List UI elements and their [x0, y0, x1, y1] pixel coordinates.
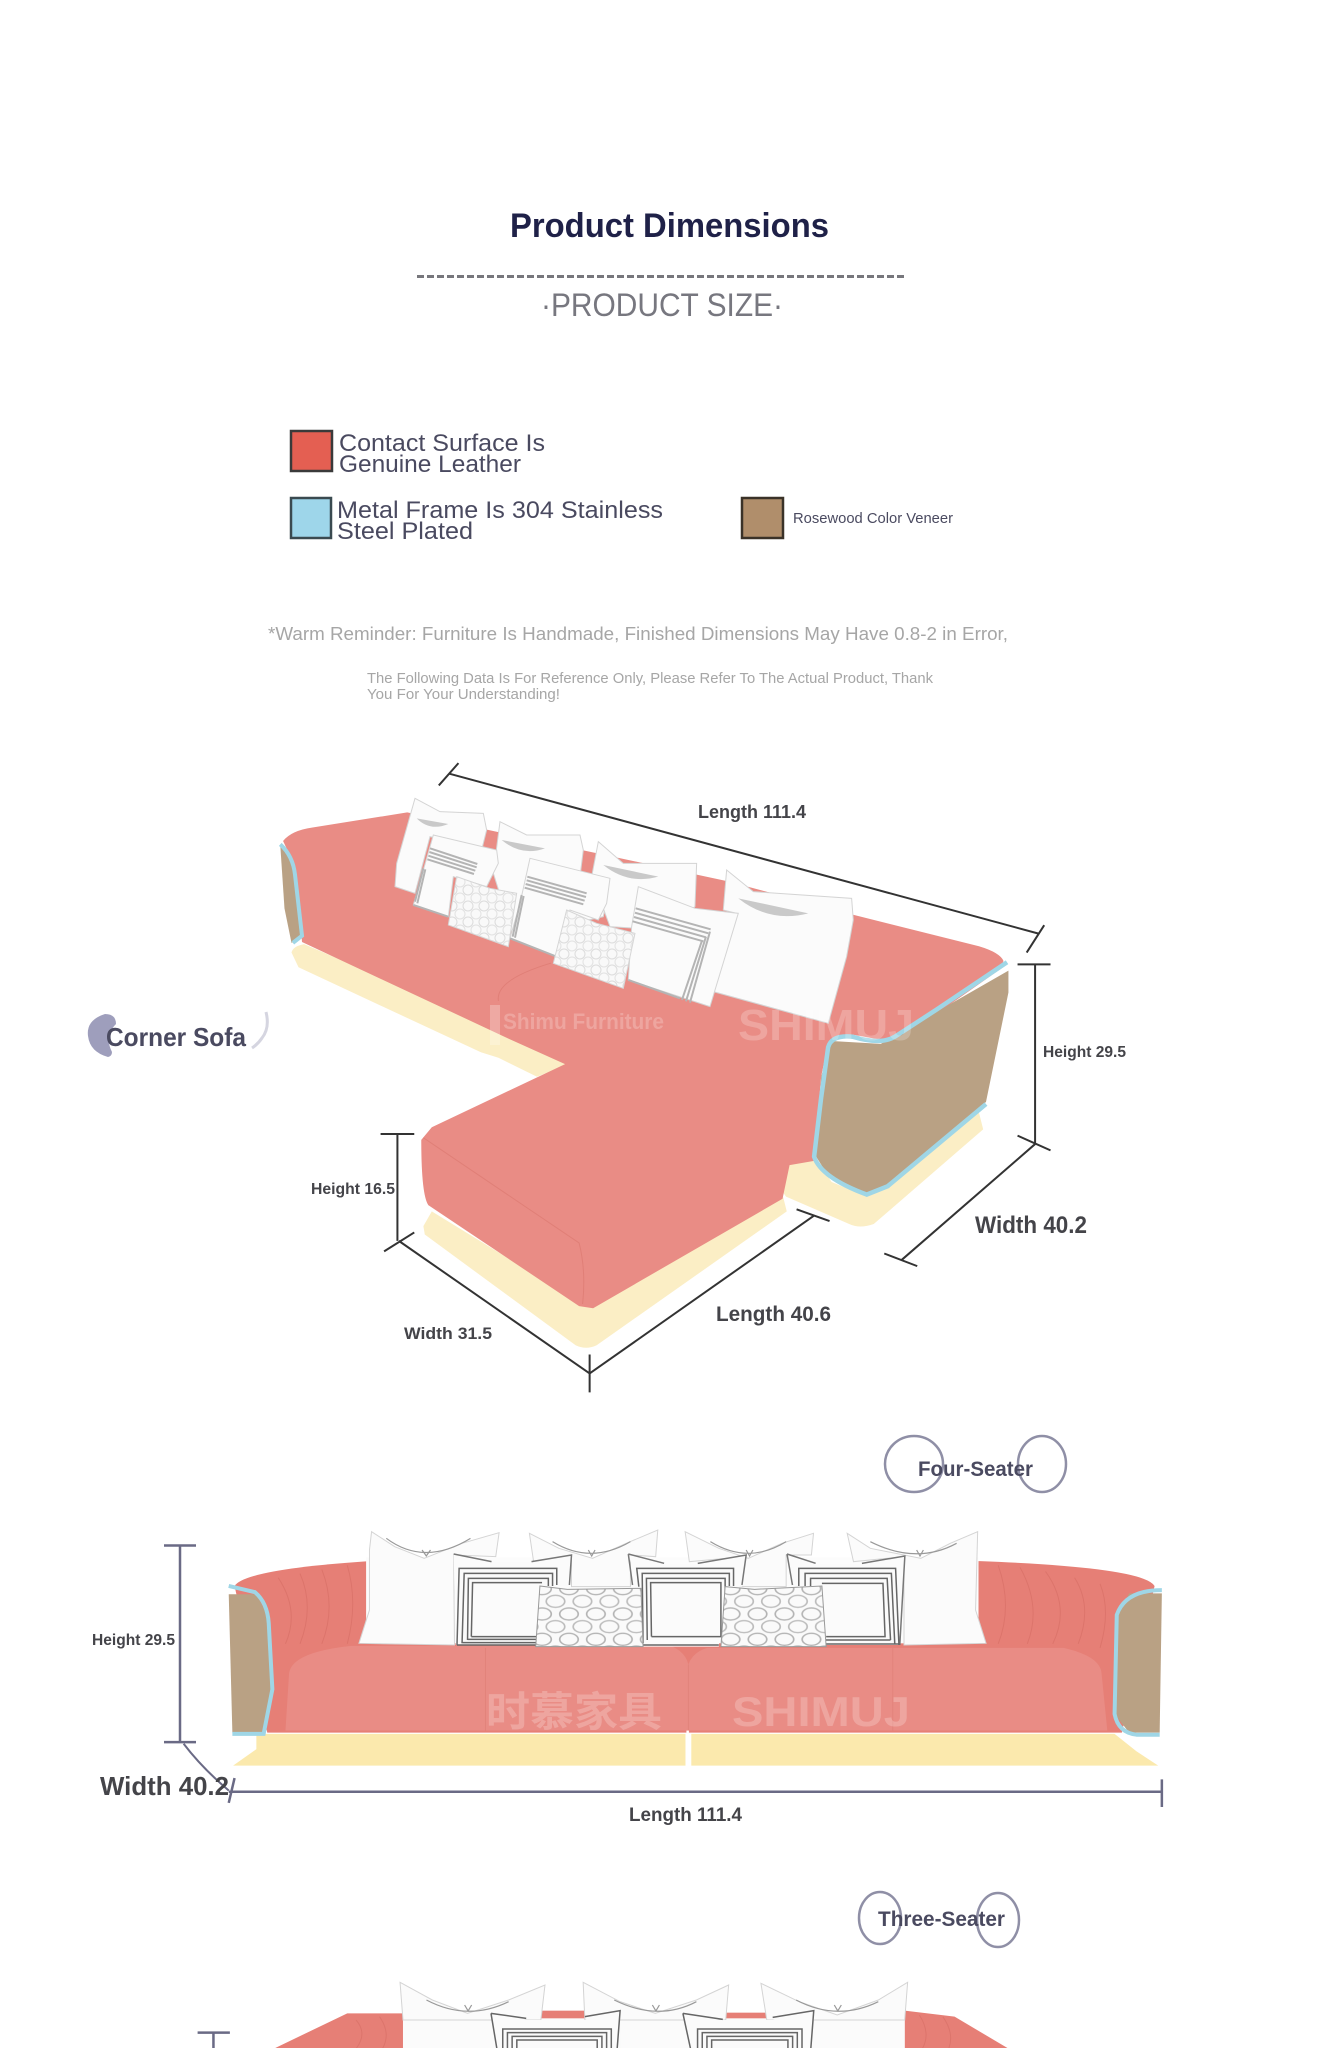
legend text: metal frame: Metal Frame Is 304 Stainless — [337, 497, 663, 524]
legend text: metal frame: Steel Plated — [337, 518, 473, 545]
watermarks — [490, 1001, 914, 1050]
panel: corner sofa — [88, 763, 1126, 1392]
pillows — [395, 798, 853, 1023]
square pillow 3 — [787, 1554, 905, 1645]
legend text: metal frame — [337, 497, 663, 545]
right arm — [816, 971, 1008, 1197]
watermarks: SHIMUJ — [738, 1001, 914, 1050]
swatch: metal frame — [291, 498, 331, 538]
dimension labels: Height 29.5 — [1043, 1044, 1126, 1061]
seam — [686, 1731, 689, 1767]
dimension labels: Length 111.4 — [629, 1805, 742, 1826]
left arm trim — [229, 1586, 272, 1734]
dimension labels: Length 40.6 — [716, 1303, 831, 1326]
base — [291, 944, 983, 1348]
warm reminder note: You For Your Understanding! — [367, 687, 560, 703]
dimension labels: Width 31.5 — [404, 1324, 492, 1343]
dimension labels: Height 16.5 — [311, 1181, 395, 1198]
three-seater drawing — [198, 1982, 1009, 2048]
dimension lines — [381, 763, 1051, 1392]
upholstery seams — [423, 963, 584, 1304]
left arm trim — [280, 844, 302, 943]
seat seams — [485, 1648, 893, 1731]
square pillow 1 — [454, 1554, 571, 1645]
legend text: leather: Contact Surface Is — [339, 430, 545, 457]
watermarks: 时慕家具 — [486, 1689, 662, 1735]
watermarks: SHIMUJ — [732, 1688, 910, 1735]
right arm trim — [1115, 1590, 1162, 1735]
quilted pillows — [536, 1586, 826, 1647]
three-seater heading: Three-Seater — [878, 1908, 1005, 1931]
legend — [291, 430, 953, 545]
swatch: leather — [291, 431, 332, 471]
base — [233, 1734, 1158, 1766]
seat — [285, 1646, 1107, 1731]
dimension lines — [164, 1545, 1162, 1807]
dimension labels: Height 29.5 — [92, 1632, 175, 1649]
dimension labels: Width 40.2 — [100, 1771, 229, 1801]
watermarks: Shimu Furniture — [503, 1009, 664, 1034]
height tick — [198, 2033, 230, 2048]
warm reminder note — [268, 623, 1008, 703]
square pillow 2 — [510, 858, 610, 957]
legend text: leather: Genuine Leather — [339, 451, 521, 478]
four-seater drawing — [229, 1530, 1162, 1767]
square pillow 1 — [413, 835, 498, 917]
back tufting — [278, 1565, 1105, 1648]
dimension labels: Width 40.2 — [975, 1212, 1087, 1239]
panel: four-seater — [92, 1436, 1162, 1826]
dimension labels: Length 111.4 — [698, 802, 806, 822]
corner sofa heading — [88, 1012, 267, 1057]
square pillow 2 — [628, 1554, 746, 1647]
warm reminder note: *Warm Reminder: Furniture Is Handmade, Finished Dimensions May Have 0.8-2 in Error, — [268, 623, 1008, 644]
legend text: leather — [339, 430, 545, 478]
four-seater heading: Four-Seater — [918, 1458, 1033, 1481]
left arm — [229, 1594, 271, 1733]
dimension labels — [311, 802, 1126, 1343]
four-seater heading — [885, 1436, 1066, 1492]
right arm — [1115, 1593, 1162, 1733]
swatch: veneer — [742, 498, 783, 538]
pillows — [359, 1530, 986, 1647]
right arm trim — [814, 962, 1007, 1195]
dashed divider and subtitle: ·PRODUCT SIZE· — [541, 287, 783, 323]
back — [235, 1561, 1155, 1733]
corner sofa heading: Corner Sofa — [106, 1022, 246, 1052]
panel: three-seater — [198, 1892, 1019, 2048]
back — [274, 2011, 1009, 2048]
quilted pillows — [448, 877, 635, 988]
pillows — [400, 1982, 908, 2048]
watermarks — [486, 1688, 910, 1735]
three-seater heading — [859, 1892, 1019, 1947]
legend text: veneer: Rosewood Color Veneer — [793, 510, 953, 527]
warm reminder note: The Following Data Is For Reference Only, Please Refer To The Actual Product, Thank — [367, 671, 934, 687]
square pillow 3 — [628, 887, 738, 1007]
title: Product Dimensions — [510, 207, 829, 245]
back tufting — [356, 2015, 951, 2048]
corner sofa drawing — [280, 798, 1008, 1348]
left arm — [280, 845, 302, 943]
dimension labels — [92, 1632, 742, 1826]
upholstery — [283, 812, 1004, 1308]
